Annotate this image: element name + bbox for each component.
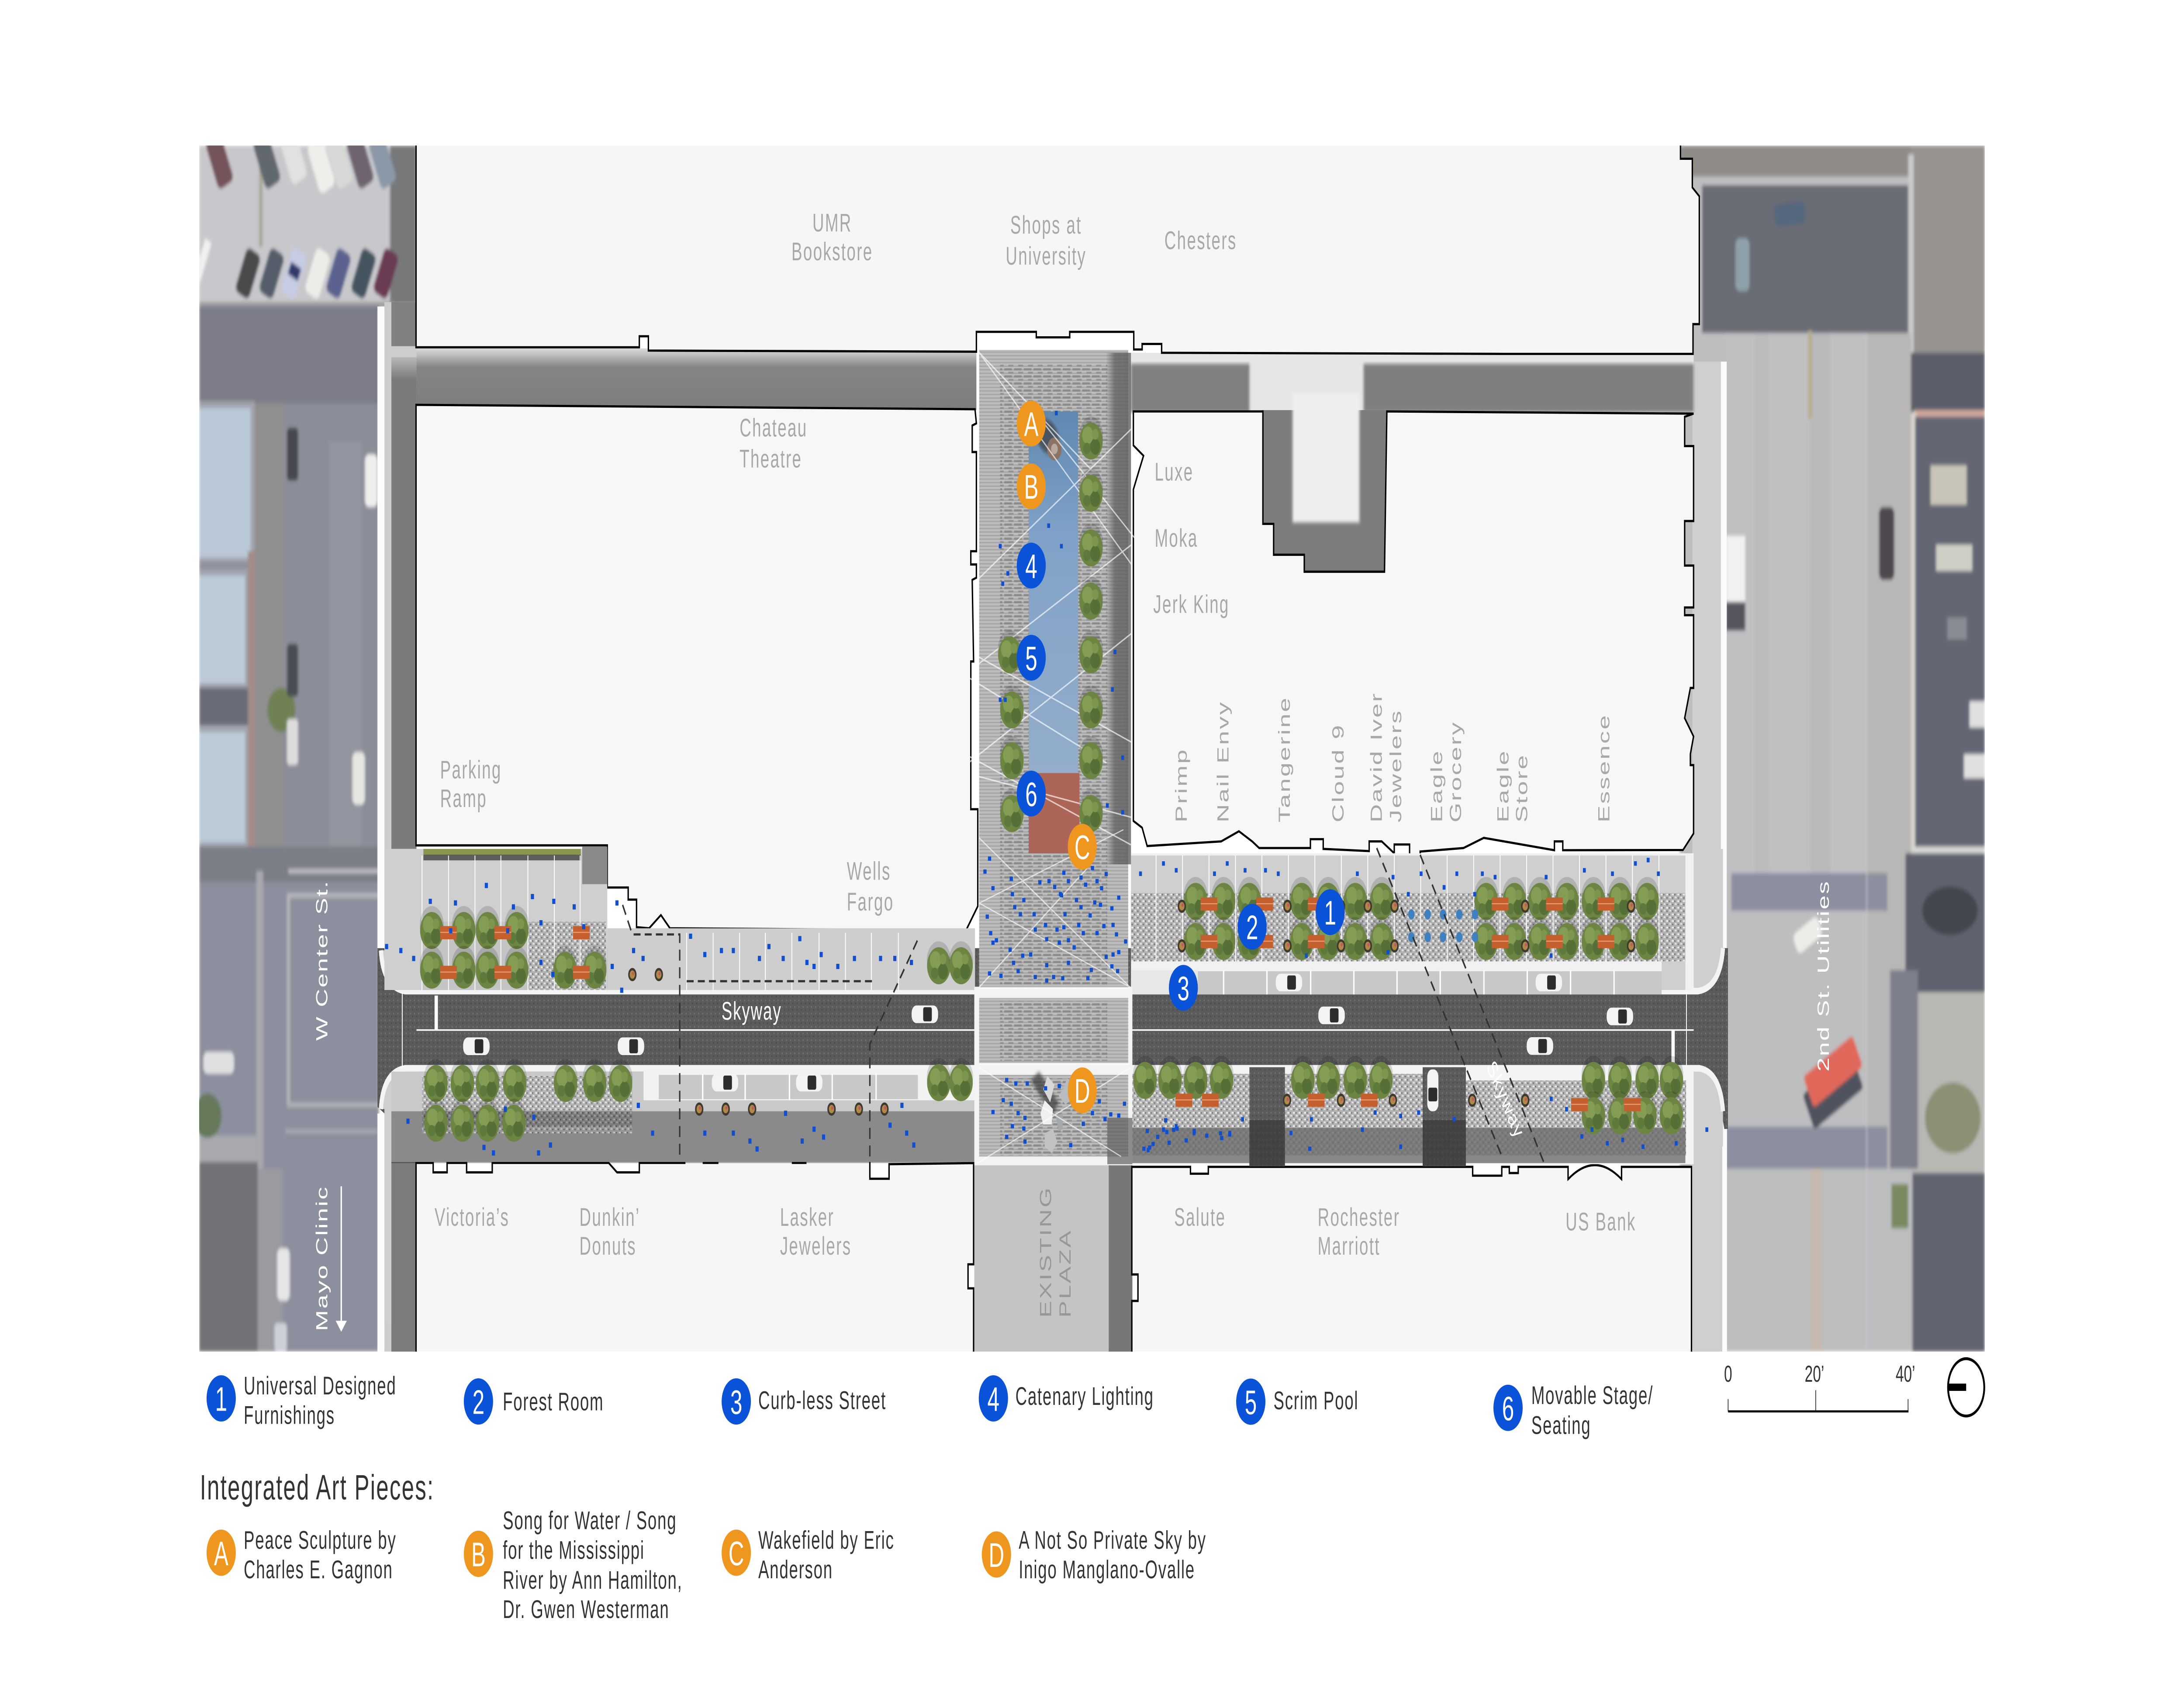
- building labels: Store: [1513, 754, 1531, 822]
- trees: south-east block: [1133, 1056, 1683, 1134]
- building labels: Lasker: [780, 1204, 834, 1232]
- street labels: [313, 880, 1832, 1331]
- building labels: Bookstore: [791, 238, 873, 266]
- marker 5: [1017, 635, 1046, 681]
- building labels: Parking: [440, 756, 502, 784]
- building labels: Essence: [1595, 714, 1613, 822]
- building labels: Jewelers: [780, 1232, 852, 1260]
- cars: [463, 974, 1633, 1111]
- street labels: Mayo Clinic: [313, 1186, 331, 1331]
- legend item 2: 2: [473, 1383, 484, 1421]
- aerial photo: east side: [1680, 145, 1985, 1352]
- building labels: Chesters: [1165, 227, 1237, 255]
- building labels: Rochester: [1318, 1204, 1400, 1232]
- legend item 5: Scrim Pool: [1273, 1387, 1358, 1415]
- A Not So Private Sky sculpture: [1031, 1072, 1075, 1153]
- trees: south-west block: [424, 1058, 973, 1142]
- streetscape block: south-west: [391, 1069, 975, 1163]
- building labels: Fargo: [847, 888, 894, 916]
- marker 3: [1169, 965, 1198, 1011]
- legend item 2: Forest Room: [503, 1388, 604, 1416]
- marker 1: [1316, 889, 1344, 935]
- art item B: Song for Water / Song: [503, 1507, 677, 1535]
- scale bar: 20’: [1805, 1362, 1824, 1387]
- legend item 4: [979, 1375, 1154, 1421]
- streetscape block: north-west: [384, 847, 975, 990]
- marker C: [1068, 824, 1097, 869]
- art item B: [464, 1507, 683, 1624]
- legend: design elements: [207, 1372, 1653, 1440]
- shaded courtyard: [1262, 410, 1387, 571]
- art item D: Inigo Manglano-Ovalle: [1019, 1556, 1195, 1584]
- legend item 2: [464, 1378, 604, 1425]
- building labels: Theatre: [740, 445, 802, 473]
- movable stage: [1029, 773, 1079, 853]
- building labels: Nail Envy: [1214, 700, 1232, 822]
- art item D: D: [988, 1536, 1004, 1574]
- plaza corner shadow: [1107, 1118, 1132, 1164]
- art item B: B: [471, 1535, 486, 1573]
- legend item 1: [207, 1372, 396, 1430]
- marker 6: [1017, 771, 1046, 817]
- marker C: C: [1075, 828, 1090, 866]
- building labels: PLAZA: [1056, 1229, 1074, 1318]
- legend item 1: Furnishings: [244, 1401, 335, 1430]
- heading: integrated art pieces: Integrated Art Pieces:: [200, 1468, 434, 1507]
- street labels: W Center St.: [313, 880, 331, 1041]
- building labels: Eagle: [1494, 749, 1512, 822]
- map markers: [1017, 400, 1344, 1113]
- legend item 5: 5: [1245, 1383, 1257, 1421]
- legend item 3: Curb-less Street: [758, 1387, 886, 1414]
- marker 6: 6: [1025, 775, 1037, 813]
- legend item 6: Seating: [1531, 1411, 1591, 1440]
- marker 2: 2: [1246, 908, 1258, 946]
- building labels: Tangerine: [1275, 696, 1293, 822]
- art item B: Dr. Gwen Westerman: [503, 1596, 669, 1624]
- streetscape block: south-east: [1131, 1067, 1694, 1166]
- marker 4: [1017, 543, 1046, 589]
- building: UMR Bookstore / Shops at University / Chesters: [416, 110, 1699, 354]
- building: Luxe, Moka, Jerk King and storefront row: [1133, 411, 1693, 856]
- arrow: toward Mayo Clinic: [335, 1186, 347, 1332]
- art item C: C: [729, 1534, 744, 1573]
- pedestrians: [385, 411, 1708, 1155]
- building labels: US Bank: [1565, 1208, 1636, 1236]
- planters: [628, 900, 1635, 1116]
- art item D: [982, 1526, 1206, 1584]
- sidewalk: east: [1691, 362, 1727, 1352]
- marker 3: 3: [1177, 969, 1189, 1007]
- plaza extension: existing plaza: [975, 1164, 1132, 1352]
- marker 4: 4: [1025, 547, 1037, 585]
- scale bar: 40’: [1896, 1362, 1915, 1387]
- skyway dashed lines: [622, 848, 1545, 1166]
- legend item 1: 1: [215, 1380, 227, 1418]
- plaza: [968, 350, 1134, 1165]
- art item A: [207, 1526, 397, 1584]
- legend item 3: [722, 1378, 886, 1425]
- street labels: Skyway: [722, 997, 782, 1025]
- building labels: Victoria’s: [435, 1204, 509, 1232]
- building labels: Dunkin’: [580, 1204, 640, 1232]
- street labels: 2nd St. Utilities: [1814, 880, 1832, 1072]
- legend item 3: 3: [730, 1383, 742, 1421]
- benches: [440, 897, 1641, 1111]
- art item A: Peace Sculpture by: [244, 1526, 397, 1555]
- legend item 6: [1493, 1382, 1653, 1440]
- legend item 6: Movable Stage/: [1531, 1382, 1653, 1410]
- art item B: for the Mississippi: [503, 1536, 645, 1565]
- building labels: Cloud 9: [1329, 724, 1347, 822]
- street and sidewalks: [377, 302, 1728, 1352]
- building labels: Moka: [1154, 524, 1198, 552]
- art item C: [722, 1526, 895, 1584]
- legend item 1: Universal Designed: [244, 1372, 396, 1400]
- scrim pool: [1029, 411, 1078, 773]
- building labels: Chateau: [740, 414, 808, 442]
- trees: north-west block: [420, 906, 973, 989]
- building labels: Grocery: [1447, 721, 1465, 822]
- building: Chateau Theatre / Parking Ramp / Wells Fargo: [416, 405, 978, 931]
- art item D: A Not So Private Sky by: [1019, 1526, 1206, 1555]
- legend item 4: 4: [987, 1380, 999, 1418]
- building labels: Shops at: [1010, 211, 1082, 239]
- building labels: Eagle: [1428, 749, 1446, 822]
- legend item 6: 6: [1502, 1390, 1514, 1428]
- marker A: [1017, 400, 1046, 446]
- streetscape block: north-east: [1131, 853, 1694, 994]
- marker 2: [1238, 904, 1267, 950]
- building labels: Wells: [847, 857, 891, 886]
- north arrow: [1948, 1359, 1984, 1416]
- plaza shadow: [1106, 353, 1131, 864]
- building labels: Marriott: [1318, 1232, 1380, 1260]
- building: Victoria's / Dunkin' Donuts / Lasker Jewelers: [416, 1153, 974, 1389]
- roadway: Skyway: [377, 849, 1728, 1147]
- art item C: Wakefield by Eric: [758, 1526, 895, 1555]
- aerial photo: west side and parking lot: [194, 127, 416, 1352]
- art item C: Anderson: [758, 1556, 833, 1584]
- shaded alley bands: [416, 348, 1694, 412]
- site plan map: [194, 110, 1985, 1389]
- marker A: A: [1024, 405, 1039, 443]
- trees: [420, 417, 1683, 1142]
- legend: art pieces: [207, 1507, 1206, 1624]
- marker D: D: [1075, 1072, 1090, 1110]
- building: Salute / Rochester Marriott / US Bank: [1132, 1165, 1691, 1389]
- building labels: UMR: [812, 209, 852, 237]
- building labels: Jerk King: [1153, 590, 1230, 619]
- building labels: David Iver: [1368, 692, 1386, 822]
- art item A: Charles E. Gagnon: [244, 1556, 393, 1584]
- building labels: Luxe: [1154, 458, 1194, 486]
- building labels: University: [1006, 242, 1086, 270]
- building labels: Ramp: [440, 785, 487, 813]
- catenary lighting: [968, 352, 1134, 1164]
- marker 1: 1: [1324, 894, 1336, 932]
- building labels: EXISTING: [1037, 1186, 1055, 1318]
- marker B: B: [1024, 468, 1038, 506]
- marker D: [1068, 1067, 1097, 1113]
- building labels: Jewelers: [1387, 709, 1405, 822]
- building labels: [435, 209, 1636, 1318]
- building labels: Primp: [1172, 748, 1190, 822]
- legend item 4: Catenary Lighting: [1016, 1383, 1154, 1411]
- scale bar: [1724, 1362, 1915, 1412]
- marker B: [1017, 463, 1046, 509]
- sidewalk: west: [377, 302, 416, 1352]
- legend item 5: [1236, 1379, 1358, 1425]
- art item B: River by Ann Hamilton,: [503, 1566, 683, 1594]
- building labels: Donuts: [580, 1232, 636, 1260]
- cafe tables: [1408, 909, 1478, 942]
- building labels: Salute: [1174, 1204, 1226, 1232]
- scale bar: 0: [1724, 1362, 1732, 1387]
- trees: plaza: [998, 417, 1103, 832]
- street labels: Skyway: [1483, 1056, 1527, 1144]
- art item A: A: [214, 1534, 228, 1573]
- trees: north-east block: [1184, 877, 1659, 960]
- peace sculpture: [1032, 412, 1063, 461]
- marker 5: 5: [1025, 639, 1037, 677]
